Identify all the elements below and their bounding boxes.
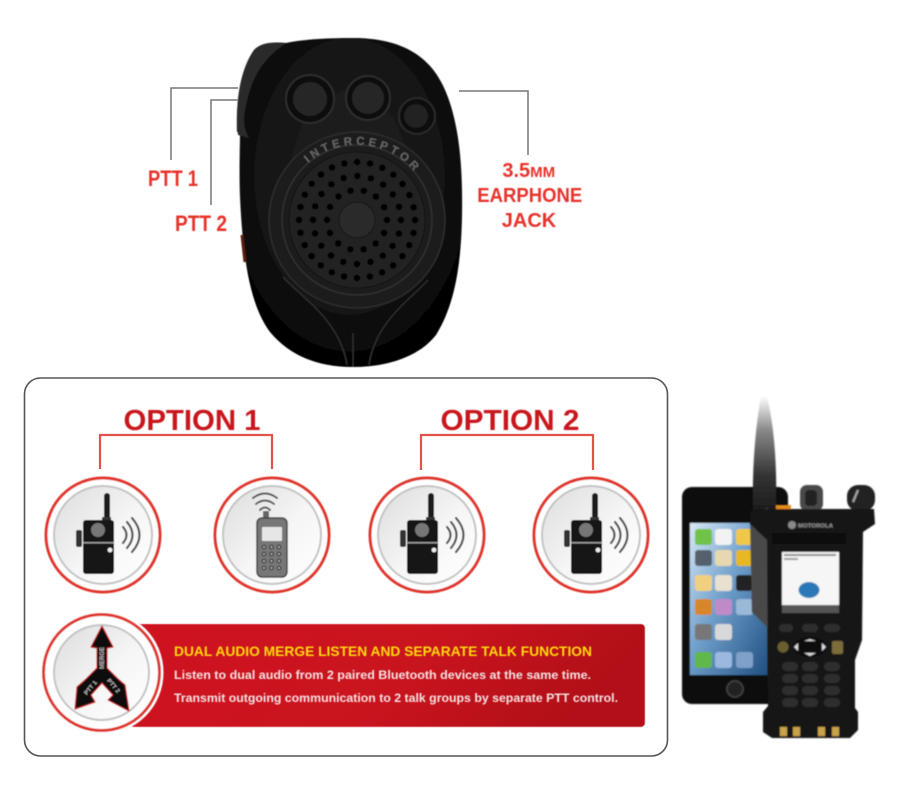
radio brand: MOTOROLA: [798, 524, 833, 530]
round buttons: [286, 75, 435, 134]
banner heading: DUAL AUDIO MERGE LISTEN AND SEPARATE TALK FUNCTION: [174, 643, 592, 659]
radio brand: [788, 521, 833, 530]
heading: option 2: OPTION 2: [440, 405, 580, 437]
speaker grille: [269, 132, 445, 308]
PTT side button: [237, 43, 285, 138]
banner body text: Listen to dual audio from 2 paired Bluetooth devices at the same time.: [174, 668, 591, 682]
icon: radio option 2 left: [370, 478, 484, 592]
icon: merge arrows: [40, 610, 164, 734]
callout: earphone jack: JACK: [502, 210, 557, 232]
panel: options: [24, 378, 668, 756]
callout: earphone jack: EARPHONE: [477, 185, 582, 207]
bracket: option 1: [100, 435, 272, 469]
bracket: option 2: [421, 435, 593, 470]
heading: option 1: OPTION 1: [124, 405, 260, 437]
icon: radio option 2 right: [534, 478, 648, 592]
icon: merge arrows: PTT 2: [105, 678, 121, 695]
icon: merge arrows: MERGE: [100, 647, 106, 669]
callout: PTT 2: [175, 100, 238, 236]
device body: [237, 38, 462, 367]
keypad: [778, 624, 843, 707]
antenna: [753, 396, 776, 510]
callout: earphone jack: [459, 91, 587, 232]
callout: earphone jack: 3.5MM: [502, 160, 555, 182]
radio body: [750, 509, 875, 738]
product photo: two-way radio: [750, 396, 875, 738]
callout: PTT 1: [148, 88, 238, 191]
gold contacts: [780, 727, 839, 736]
device curved seams: [283, 277, 428, 367]
icon: mobile phone option 1: [215, 478, 329, 592]
radio logo: [798, 582, 820, 598]
product photo: smartphone: [682, 487, 788, 704]
icon: radio option 1: [46, 478, 160, 592]
callout: PTT 1: PTT 1: [148, 166, 198, 191]
knobs: [800, 485, 875, 511]
orange edge glint: [242, 235, 245, 262]
radio side handles: [750, 508, 768, 628]
product photo: speaker microphone: [236, 37, 463, 368]
banner: dual audio merge: [130, 624, 645, 727]
app icons: [695, 529, 753, 668]
icon: merge arrows: PTT 1: [84, 680, 99, 697]
banner body text: Transmit outgoing communication to 2 talk groups by separate PTT control.: [174, 691, 618, 705]
brand text on device: INTERCEPTOR: [303, 136, 419, 171]
radio screen: [782, 552, 839, 605]
callout: PTT 2: PTT 2: [175, 211, 227, 236]
